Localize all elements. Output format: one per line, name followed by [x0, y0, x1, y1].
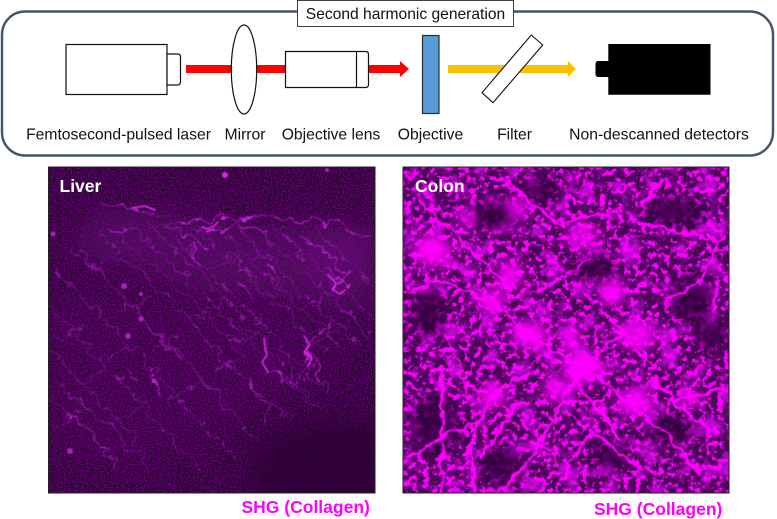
- icon: objective lens: [286, 52, 368, 88]
- label: liver: Liver: [60, 176, 102, 196]
- collagen texture: [403, 167, 729, 493]
- label: femtosecond-pulsed laser: Femtosecond-pulsed laser: [26, 126, 211, 144]
- collagen fibres: [408, 180, 725, 493]
- bright upper fibres: [70, 205, 368, 450]
- label: objective: Objective: [398, 126, 463, 144]
- panel: colon micrograph: [403, 167, 729, 493]
- icon: mirror: [231, 25, 257, 114]
- label: objective lens: Objective lens: [282, 126, 380, 144]
- mid-scale tissue tone: [403, 167, 729, 493]
- icon: femtosecond-pulsed laser: [66, 44, 180, 94]
- icon: non-descanned detectors: [596, 44, 710, 95]
- panel frame: [2, 12, 773, 156]
- bright regions: [414, 197, 702, 416]
- icon: objective: [422, 36, 439, 114]
- label: filter: Filter: [497, 126, 532, 144]
- icon: filter: [482, 35, 543, 103]
- image border: [48, 167, 375, 493]
- arrow: red laser beam: [186, 61, 409, 77]
- dark regions: [412, 178, 728, 483]
- collagen spots: [50, 168, 329, 454]
- label: non-descanned detectors: Non-descanned detectors: [569, 126, 749, 144]
- tissue glow: [50, 208, 375, 470]
- label: mirror: Mirror: [225, 126, 265, 144]
- image border: [403, 167, 729, 493]
- arrow: yellow emission beam: [448, 61, 576, 77]
- caption: liver SHG collagen: SHG (Collagen): [242, 497, 370, 517]
- panel: liver micrograph: [48, 166, 376, 494]
- dark lower corner: [236, 405, 374, 492]
- panel: second harmonic generation setup: [2, 0, 773, 156]
- caption: colon SHG collagen: SHG (Collagen): [594, 499, 722, 519]
- label: colon: Colon: [415, 176, 465, 196]
- collagen fibres: [50, 225, 375, 470]
- heading: second harmonic generation: [298, 0, 514, 26]
- heading: second harmonic generation: Second harmonic generation: [306, 6, 505, 23]
- brightest fibres: [132, 206, 345, 372]
